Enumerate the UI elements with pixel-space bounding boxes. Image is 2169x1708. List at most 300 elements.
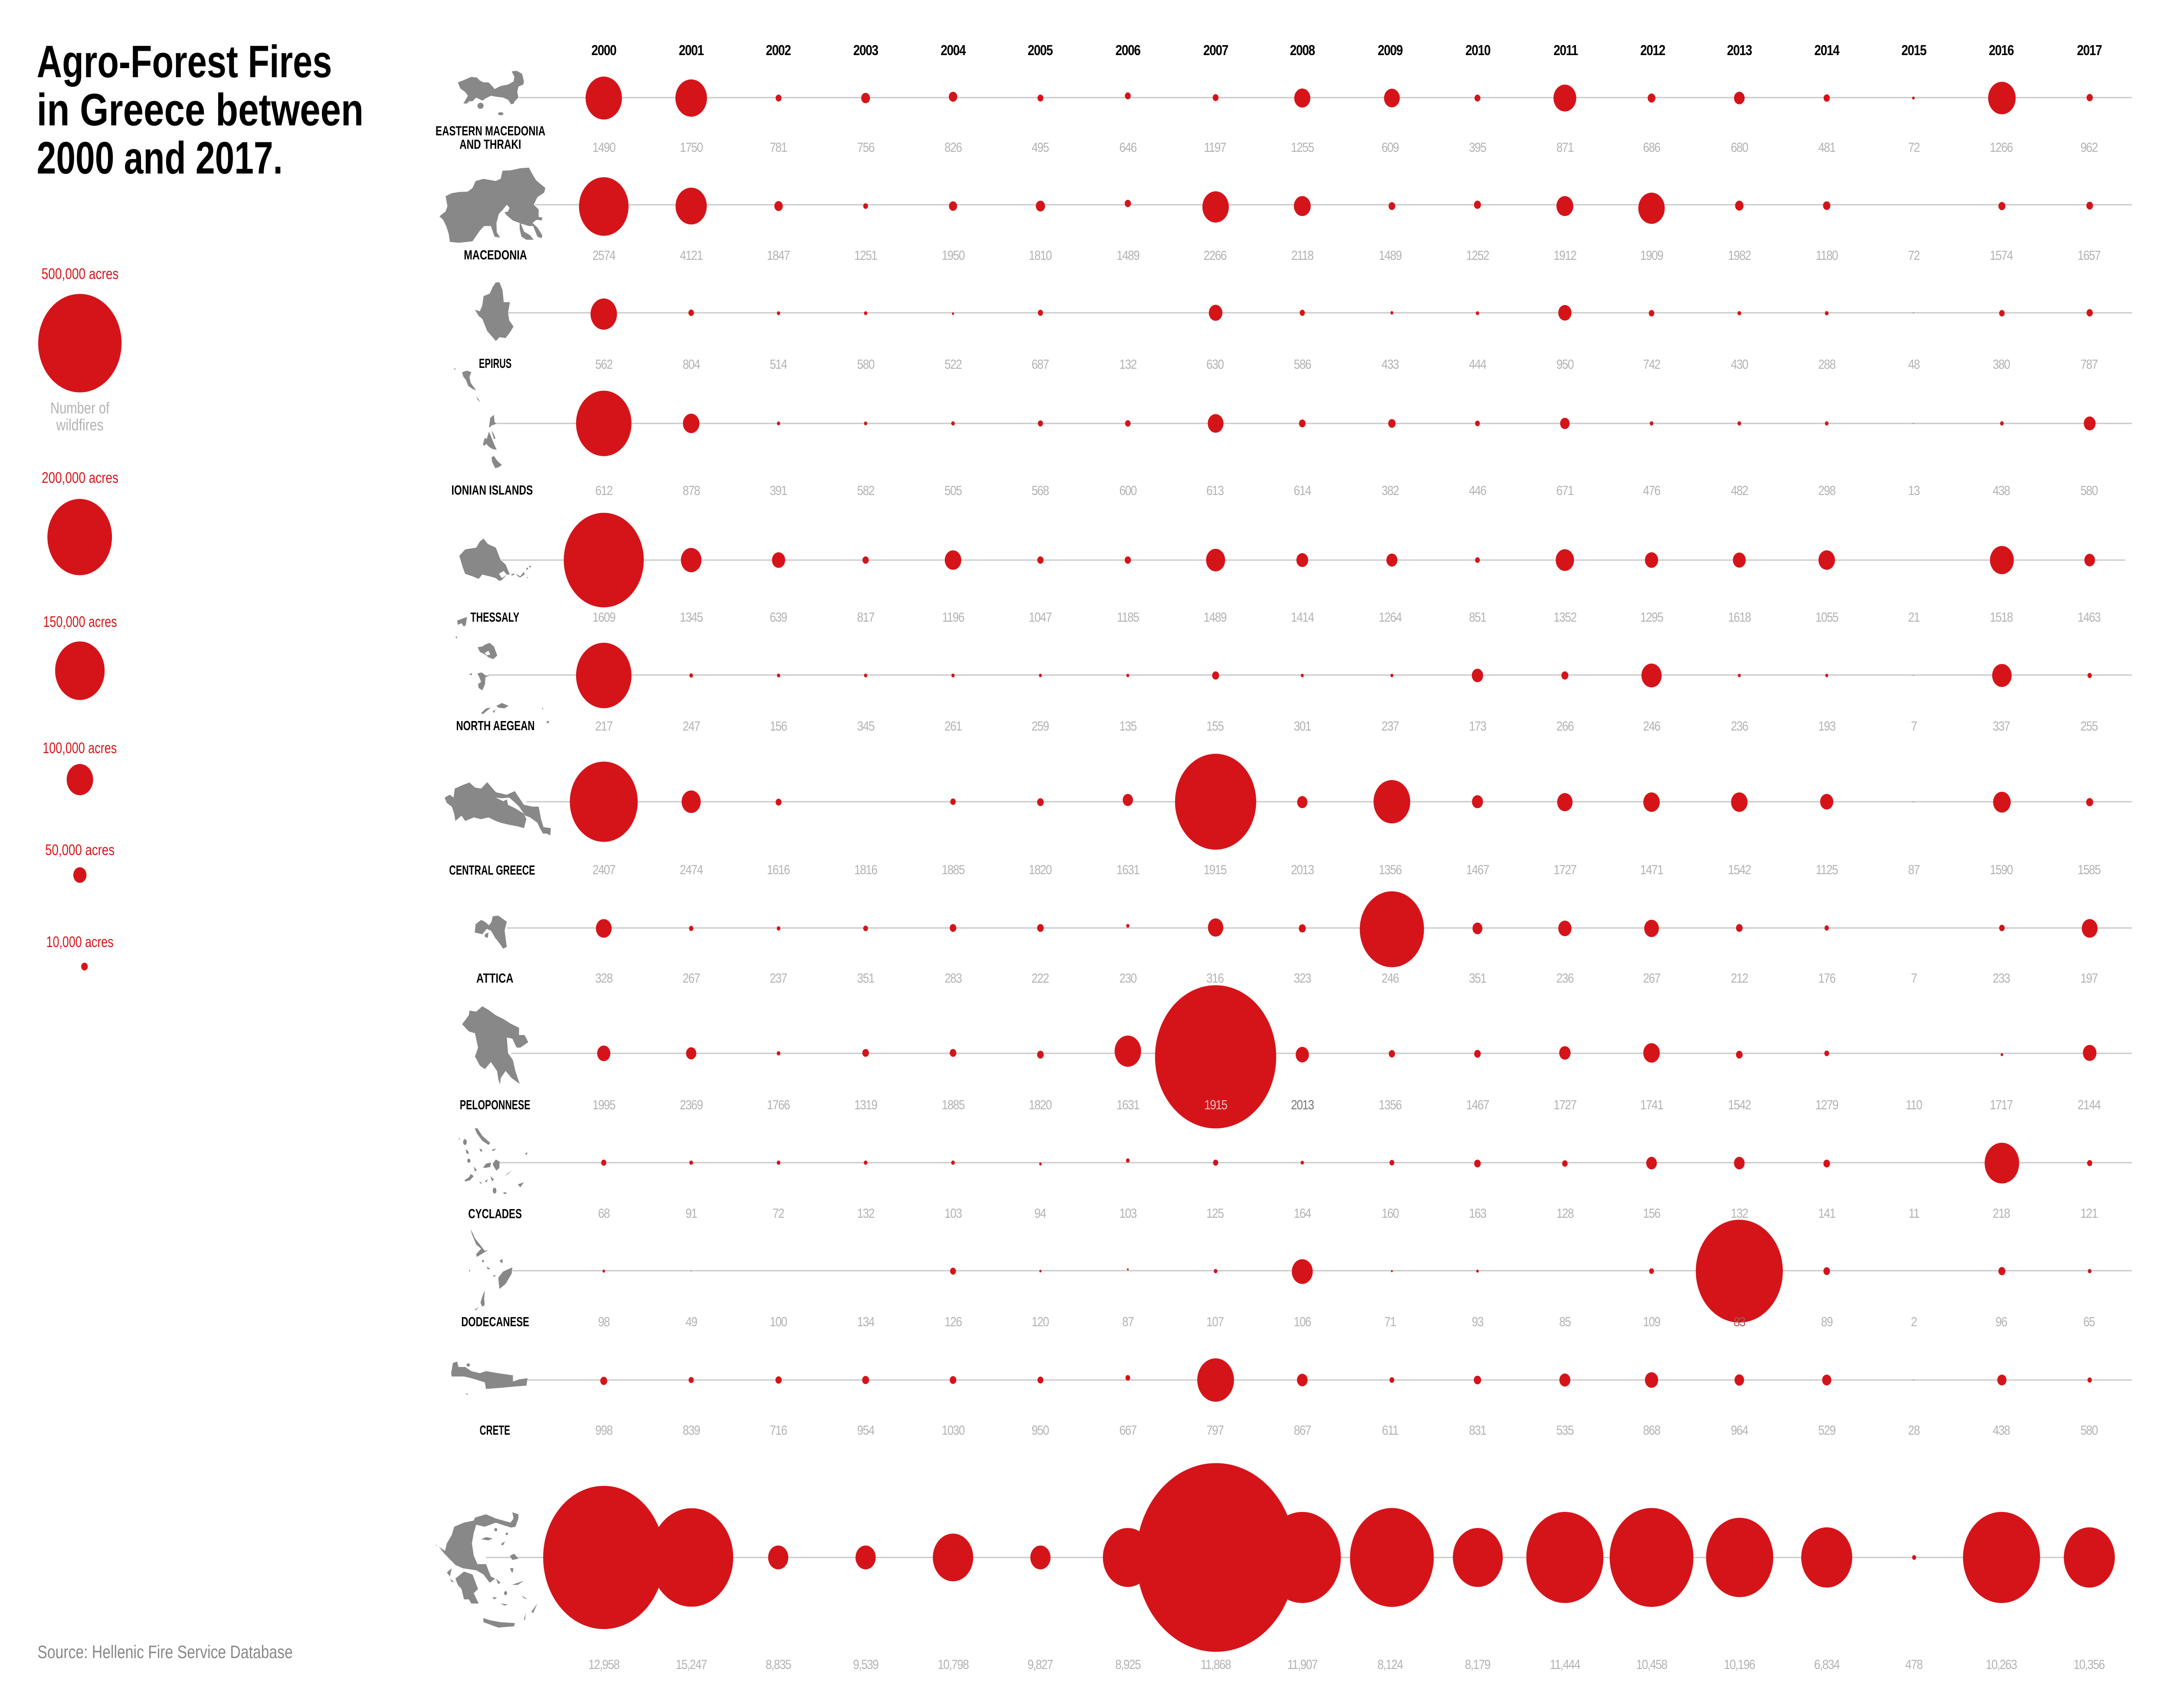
year header: 2007	[1203, 43, 1228, 59]
wildfire counts: 871	[1556, 140, 1574, 155]
wildfire counts: 580	[2081, 1423, 2098, 1438]
wildfire counts: 1950	[942, 248, 965, 263]
wildfire counts: 1657	[2077, 248, 2100, 263]
wildfire counts: 529	[1818, 1423, 1835, 1438]
wildfire counts: 283	[944, 971, 962, 986]
wildfire counts: 155	[1206, 719, 1224, 734]
wildfire counts: 817	[857, 610, 875, 625]
wildfire counts: 382	[1382, 483, 1399, 498]
wildfire counts: 1847	[767, 248, 790, 263]
region label: AND THRAKI	[459, 137, 521, 152]
wildfire counts: 164	[1294, 1206, 1311, 1221]
wildfire counts: totals: 12,958	[588, 1657, 619, 1672]
wildfire counts	[593, 862, 2100, 878]
wildfire counts	[593, 248, 2100, 263]
wildfire counts: 160	[1382, 1206, 1399, 1221]
wildfire counts: 687	[1032, 357, 1049, 372]
region label: CENTRAL GREECE	[449, 863, 535, 878]
wildfire counts: 476	[1643, 483, 1660, 498]
year header: 2005	[1028, 43, 1053, 59]
region label: NORTH AEGEAN	[456, 718, 535, 734]
wildfire counts: totals: 10,356	[2074, 1657, 2105, 1672]
wildfire counts: 351	[1469, 971, 1486, 986]
legend item: 150,000 acres	[43, 613, 117, 700]
wildfire counts: totals: 9,539	[853, 1657, 878, 1672]
wildfire counts: 1909	[1640, 248, 1663, 263]
bubbles: Attica	[596, 891, 2097, 967]
bubbles: Cyclades	[601, 1143, 2092, 1183]
map: Attica	[475, 915, 507, 949]
wildfire counts: 580	[2081, 483, 2098, 498]
wildfire counts	[595, 971, 2098, 986]
wildfire counts: 103	[944, 1206, 962, 1221]
wildfire counts: 110	[1906, 1098, 1922, 1113]
wildfire counts: 91	[685, 1206, 697, 1221]
title: in Greece between	[37, 84, 364, 135]
wildfire counts	[595, 719, 2098, 734]
wildfire counts: 7	[1911, 719, 1917, 734]
wildfire counts: 1885	[942, 862, 965, 878]
wildfire counts	[595, 357, 2098, 372]
row: Crete	[451, 1358, 2132, 1438]
legend item: 200,000 acres	[42, 469, 118, 575]
wildfire counts: 742	[1643, 357, 1660, 372]
wildfire counts: 1810	[1029, 248, 1052, 263]
wildfire counts: 49	[685, 1315, 697, 1330]
wildfire counts: 686	[1643, 140, 1660, 155]
year header: 2011	[1553, 43, 1578, 59]
wildfire counts: 13	[1908, 483, 1920, 498]
year header: 2008	[1290, 43, 1315, 59]
legend item: 10,000 acres	[46, 934, 114, 970]
wildfire counts: 83	[1733, 1315, 1745, 1330]
wildfire counts: 514	[770, 357, 787, 372]
legend item: 500,000 acres: 500,000 acres	[42, 266, 118, 282]
wildfire counts: 481	[1818, 140, 1835, 155]
wildfire counts: 255	[2081, 719, 2098, 734]
wildfire counts: 1489	[1117, 248, 1140, 263]
wildfire counts: 1180	[1816, 248, 1838, 263]
wildfire counts: 1727	[1553, 862, 1576, 878]
wildfire counts: 998	[595, 1423, 613, 1438]
wildfire counts: 1631	[1117, 862, 1140, 878]
year header: 2016	[1989, 43, 2014, 59]
wildfire counts: 176	[1818, 971, 1835, 986]
wildfire counts: 1356	[1379, 1098, 1402, 1113]
wildfire counts: 1264	[1379, 610, 1402, 625]
wildfire counts: 804	[683, 357, 700, 372]
wildfire counts: 103	[1119, 1206, 1137, 1221]
row: Eastern Macedonia and Thraki	[436, 71, 2132, 155]
wildfire counts: 2369	[680, 1098, 703, 1113]
wildfire counts: totals: 10,196	[1724, 1657, 1755, 1672]
wildfire counts: 1489	[1379, 248, 1402, 263]
wildfire counts: 1915	[1204, 1098, 1227, 1113]
wildfire counts: 1915	[1203, 862, 1226, 878]
wildfire counts: 2013	[1291, 862, 1314, 878]
wildfire counts: 351	[857, 971, 875, 986]
wildfire counts	[598, 1315, 2095, 1330]
wildfire counts	[598, 1206, 2098, 1221]
wildfire counts: totals: 11,444	[1550, 1657, 1580, 1672]
year header: 2000	[591, 43, 616, 59]
map: Ionian Islands	[454, 368, 502, 468]
wildfire counts: 72	[1908, 248, 1920, 263]
wildfire counts: 233	[1992, 971, 2010, 986]
wildfire counts: 671	[1556, 483, 1574, 498]
wildfire counts: totals: 8,925	[1115, 1657, 1141, 1672]
wildfire counts: 831	[1469, 1423, 1486, 1438]
wildfire counts: totals: 10,263	[1986, 1657, 2017, 1672]
wildfire counts: 1489	[1203, 610, 1226, 625]
wildfire counts: 1727	[1553, 1098, 1576, 1113]
wildfire counts: 89	[1821, 1315, 1833, 1330]
year header: 2002	[766, 43, 791, 59]
region label: THESSALY	[470, 610, 519, 625]
title: 2000 and 2017.	[37, 132, 283, 184]
bubbles: Crete	[600, 1358, 2092, 1402]
wildfire counts: 1255	[1291, 140, 1314, 155]
wildfire counts: 950	[1032, 1423, 1049, 1438]
wildfire counts: 600	[1119, 483, 1137, 498]
wildfire counts: 135	[1119, 719, 1137, 734]
wildfire counts: 1912	[1553, 248, 1576, 263]
wildfire counts: 301	[1294, 719, 1311, 734]
wildfire counts: 380	[1992, 357, 2010, 372]
wildfire counts: 1982	[1728, 248, 1751, 263]
map: Cyclades	[459, 1128, 528, 1194]
wildfire counts: 246	[1643, 719, 1660, 734]
region bubbles: Greece total	[543, 1463, 2115, 1652]
wildfire counts: 156	[1643, 1206, 1660, 1221]
wildfire counts: 1047	[1029, 610, 1052, 625]
wildfire counts: 639	[770, 610, 787, 625]
row: Attica	[475, 891, 2132, 986]
wildfire counts: totals: 15,247	[676, 1657, 707, 1672]
year header: 2010	[1465, 43, 1491, 59]
wildfire counts: 1185	[1117, 610, 1139, 625]
wildfire counts: 630	[1206, 357, 1224, 372]
wildfire counts: 611	[1382, 1423, 1399, 1438]
wildfire counts: 237	[770, 971, 787, 986]
wildfire counts	[593, 610, 2100, 625]
wildfire counts: 1197	[1204, 140, 1226, 155]
wildfire counts: 1616	[767, 862, 790, 878]
wildfire counts: 716	[770, 1423, 787, 1438]
wildfire counts: 222	[1032, 971, 1049, 986]
region label: CYCLADES	[468, 1206, 522, 1222]
wildfire counts: 72	[1908, 140, 1920, 155]
wildfire counts: 71	[1384, 1315, 1396, 1330]
wildfire counts: totals: 8,835	[766, 1657, 791, 1672]
year header: 2013	[1727, 43, 1752, 59]
year header	[591, 43, 2102, 59]
wildfire counts: 132	[857, 1206, 875, 1221]
wildfire counts: 2144	[2077, 1098, 2101, 1113]
wildfire counts: 1414	[1291, 610, 1314, 625]
wildfire counts: 2266	[1203, 248, 1226, 263]
wildfire counts: 612	[595, 483, 613, 498]
region label: PELOPONNESE	[460, 1098, 530, 1113]
wildfire counts: 4121	[680, 248, 703, 263]
wildfire counts: 132	[1119, 357, 1137, 372]
wildfire counts: 28	[1908, 1423, 1920, 1438]
wildfire counts: 950	[1556, 357, 1574, 372]
wildfire counts: 1251	[854, 248, 877, 263]
wildfire counts: 2013	[1291, 1098, 1314, 1113]
region label: MACEDONIA	[464, 248, 527, 263]
wildfire counts: 1352	[1553, 610, 1576, 625]
wildfire counts: 1820	[1029, 1098, 1052, 1113]
wildfire counts: 98	[598, 1315, 610, 1330]
wildfire counts: totals	[588, 1657, 2105, 1672]
wildfire counts: 522	[944, 357, 962, 372]
wildfire counts: 107	[1206, 1315, 1224, 1330]
wildfire counts: 839	[683, 1423, 700, 1438]
wildfire counts: 1574	[1990, 248, 2013, 263]
wildfire counts: 1590	[1990, 862, 2013, 878]
legend item: 10,000 acres: 10,000 acres	[46, 934, 114, 951]
row: Ionian Islands	[451, 368, 2132, 498]
wildfire counts: 134	[857, 1315, 875, 1330]
wildfire counts: 1266	[1990, 140, 2013, 155]
wildfire counts	[593, 1098, 2101, 1113]
wildfire counts: 1295	[1640, 610, 1663, 625]
wildfire counts: 266	[1556, 719, 1574, 734]
wildfire counts: 212	[1731, 971, 1748, 986]
wildfire counts: 1816	[854, 862, 877, 878]
bubbles: Eastern Macedonia and Thraki	[586, 76, 2093, 120]
year header: 2003	[853, 43, 878, 59]
wildfire counts: 482	[1731, 483, 1748, 498]
wildfire counts: totals: 8,179	[1465, 1657, 1491, 1672]
wildfire counts	[595, 483, 2098, 498]
wildfire counts: 247	[683, 719, 700, 734]
row: Thessaly	[459, 513, 2125, 625]
wildfire counts: totals: 8,124	[1377, 1657, 1403, 1672]
legend item: 100,000 acres: 100,000 acres	[43, 740, 117, 757]
row: Peloponnese	[460, 985, 2132, 1128]
wildfire counts: 1885	[942, 1098, 965, 1113]
wildfire counts: 141	[1818, 1206, 1835, 1221]
map: North Aegean	[455, 617, 549, 723]
bubbles: Ionian Islands	[576, 390, 2096, 456]
wildfire counts: 826	[944, 140, 962, 155]
wildfire counts: 120	[1032, 1315, 1049, 1330]
wildfire counts: 495	[1032, 140, 1049, 155]
wildfire counts: 433	[1382, 357, 1399, 372]
wildfire counts: 21	[1908, 610, 1920, 625]
wildfire counts: 868	[1643, 1423, 1660, 1438]
legend item: 100,000 acres	[43, 740, 117, 795]
bubbles: Epirus	[590, 298, 2093, 330]
row: North Aegean	[455, 617, 2132, 734]
wildfire counts: 562	[595, 357, 613, 372]
wildfire counts: 1618	[1728, 610, 1751, 625]
wildfire counts: 132	[1731, 1206, 1748, 1221]
wildfire counts: 1542	[1728, 1098, 1751, 1113]
wildfire counts: 1252	[1466, 248, 1489, 263]
legend item: 500,000 acres	[38, 266, 121, 434]
wildfire counts: 1995	[593, 1098, 616, 1113]
wildfire counts: 125	[1206, 1206, 1224, 1221]
wildfire counts: 328	[595, 971, 613, 986]
bubbles: Peloponnese	[597, 985, 2097, 1128]
wildfire counts: 867	[1294, 1423, 1311, 1438]
wildfire counts	[593, 140, 2098, 155]
wildfire counts: 586	[1294, 357, 1311, 372]
wildfire counts: 94	[1034, 1206, 1046, 1221]
wildfire counts: 100	[770, 1315, 787, 1330]
region label: IONIAN ISLANDS	[451, 483, 533, 498]
wildfire counts: 163	[1469, 1206, 1486, 1221]
wildfire counts: 298	[1818, 483, 1835, 498]
wildfire counts: totals: 10,458	[1636, 1657, 1667, 1672]
wildfire counts: 438	[1992, 483, 2010, 498]
wildfire counts	[595, 1423, 2098, 1438]
wildfire counts: 11	[1909, 1206, 1919, 1221]
year header: 2001	[679, 43, 704, 59]
wildfire counts: totals: 11,868	[1201, 1657, 1231, 1672]
map: Epirus	[475, 282, 514, 341]
legend item: 200,000 acres: 200,000 acres	[42, 469, 118, 486]
wildfire counts: 1196	[942, 610, 964, 625]
map: Dodecanese	[469, 1229, 512, 1310]
row: Epirus	[475, 282, 2132, 372]
title	[37, 36, 364, 184]
bubbles: Macedonia	[579, 177, 2093, 236]
wildfire counts: 430	[1731, 357, 1748, 372]
legend item: 500,000 acres: Number of	[50, 400, 110, 417]
wildfire counts: 680	[1731, 140, 1748, 155]
wildfire counts: 580	[857, 357, 875, 372]
year header: 2006	[1115, 43, 1140, 59]
region label: EPIRUS	[479, 356, 511, 371]
wildfire counts: 72	[773, 1206, 784, 1221]
row: Cyclades	[459, 1128, 2132, 1222]
wildfire counts: 236	[1556, 971, 1574, 986]
wildfire counts: totals: 10,798	[937, 1657, 969, 1672]
legend item: 50,000 acres: 50,000 acres	[45, 842, 115, 859]
wildfire counts: 193	[1818, 719, 1835, 734]
wildfire counts: 48	[1908, 357, 1920, 372]
wildfire counts: 121	[2081, 1206, 2098, 1221]
wildfire counts: 391	[770, 483, 787, 498]
wildfire counts: 1820	[1029, 862, 1052, 878]
wildfire counts: 173	[1469, 719, 1486, 734]
wildfire counts: 1471	[1640, 862, 1663, 878]
wildfire counts: 337	[1992, 719, 2010, 734]
row: Dodecanese	[461, 1220, 2132, 1330]
wildfire counts: 87	[1122, 1315, 1134, 1330]
wildfire counts: 109	[1643, 1315, 1660, 1330]
map: Greece	[436, 1512, 537, 1628]
wildfire counts: 217	[595, 719, 613, 734]
wildfire counts: 1279	[1815, 1098, 1838, 1113]
year header: 2004	[940, 43, 966, 59]
wildfire counts: 609	[1382, 140, 1399, 155]
wildfire counts: 851	[1469, 610, 1486, 625]
wildfire counts: 156	[770, 719, 787, 734]
wildfire counts: 267	[1643, 971, 1660, 986]
wildfire counts: 65	[2083, 1315, 2095, 1330]
wildfire counts: 535	[1556, 1423, 1574, 1438]
wildfire counts: 1518	[1990, 610, 2013, 625]
wildfire counts: 2118	[1291, 248, 1314, 263]
wildfire counts: 128	[1556, 1206, 1574, 1221]
wildfire counts: 267	[683, 971, 700, 986]
wildfire counts: 345	[857, 719, 875, 734]
wildfire counts: 316	[1206, 971, 1224, 986]
wildfire counts: 646	[1119, 140, 1137, 155]
wildfire counts: 2474	[680, 862, 703, 878]
map: Macedonia	[439, 167, 545, 243]
wildfire counts: totals: 11,907	[1287, 1657, 1317, 1672]
row: Greece total	[436, 1463, 2115, 1672]
wildfire counts: 395	[1469, 140, 1486, 155]
legend item: 50,000 acres	[45, 842, 115, 883]
wildfire counts: 446	[1469, 483, 1486, 498]
wildfire counts: 1585	[2077, 862, 2100, 878]
wildfire counts: 964	[1731, 1423, 1749, 1438]
wildfire counts: totals: 6,834	[1814, 1657, 1840, 1672]
wildfire counts: 68	[598, 1206, 610, 1221]
wildfire counts: totals: 9,827	[1028, 1657, 1053, 1672]
legend item: 150,000 acres: 150,000 acres	[43, 613, 117, 630]
wildfire counts: 582	[857, 483, 875, 498]
row: Macedonia	[439, 167, 2132, 263]
wildfire counts: 878	[683, 483, 700, 498]
wildfire counts: totals: 478	[1905, 1657, 1923, 1672]
map: Peloponnese	[462, 1006, 528, 1085]
wildfire counts: 197	[2081, 971, 2098, 986]
wildfire counts: 237	[1382, 719, 1399, 734]
year header: 2012	[1640, 43, 1665, 59]
wildfire counts: 797	[1206, 1423, 1224, 1438]
wildfire counts: 1766	[767, 1098, 790, 1113]
region label: EASTERN MACEDONIA	[436, 124, 545, 139]
region label: DODECANESE	[461, 1315, 529, 1330]
wildfire counts: 438	[1992, 1423, 2010, 1438]
wildfire counts: 954	[857, 1423, 875, 1438]
region label: CRETE	[480, 1423, 510, 1438]
wildfire counts: 323	[1294, 971, 1311, 986]
map: Central Greece	[445, 782, 551, 836]
bubbles: Thessaly	[564, 513, 2095, 607]
wildfire counts: 1542	[1728, 862, 1751, 878]
wildfire counts: 2	[1911, 1315, 1917, 1330]
wildfire counts: 246	[1382, 971, 1399, 986]
wildfire counts: 667	[1119, 1423, 1137, 1438]
bubbles: North Aegean	[576, 643, 2092, 708]
map: Thessaly	[459, 538, 531, 581]
wildfire counts: 288	[1818, 357, 1835, 372]
wildfire counts: 93	[1472, 1315, 1484, 1330]
wildfire counts: 444	[1469, 357, 1487, 372]
row: Central Greece	[445, 754, 2132, 878]
wildfire counts: 1490	[593, 140, 616, 155]
wildfire counts: 106	[1294, 1315, 1311, 1330]
wildfire counts: 1055	[1815, 610, 1838, 625]
wildfire counts: 1356	[1379, 862, 1402, 878]
legend item: 500,000 acres: wildfires	[56, 416, 104, 434]
wildfire counts: 613	[1206, 483, 1224, 498]
wildfire counts: 2407	[593, 862, 616, 878]
wildfire counts: 1319	[854, 1098, 877, 1113]
wildfire counts: 568	[1032, 483, 1049, 498]
wildfire counts: 505	[944, 483, 962, 498]
year header: 2017	[2077, 43, 2102, 59]
